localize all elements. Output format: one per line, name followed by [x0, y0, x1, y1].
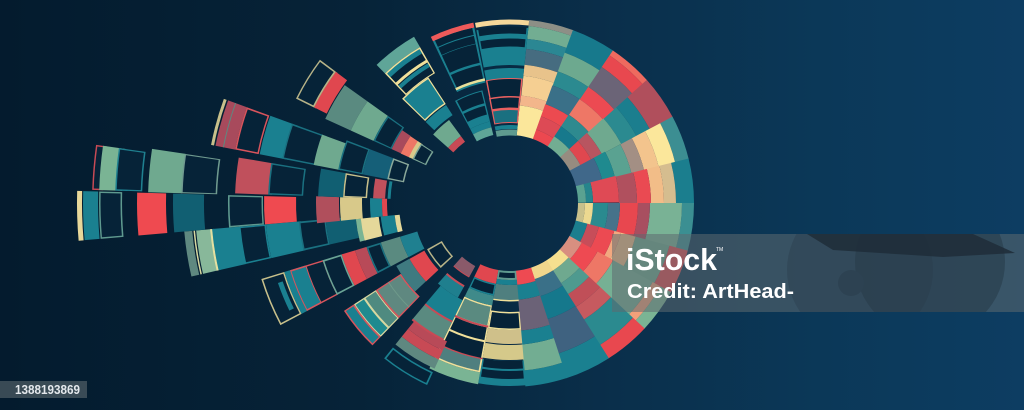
ring sector 57-72 — [339, 32, 681, 374]
trademark: TM — [716, 247, 723, 253]
wedge row 100-116 — [332, 25, 688, 381]
wedge row 114-129 outer — [317, 10, 703, 396]
ring sector 29-43 — [332, 25, 688, 381]
wedge row 119-132 inner — [408, 102, 612, 304]
wedge row 167-175 far — [187, 212, 318, 276]
wedge row 167-175 near — [340, 33, 680, 373]
wedge row 224-237 middle — [376, 69, 644, 337]
wedge row 152-163 inner — [324, 17, 696, 389]
ring sector 43-57 — [334, 27, 686, 379]
wedge row 85-100 — [338, 31, 682, 375]
ring sector 304-318 — [329, 22, 691, 384]
wedge row 206-217 outer — [304, 65, 342, 112]
wedge row 191-200 far — [212, 99, 311, 169]
stock id tag: 1388193869 — [15, 383, 80, 397]
ring sector 290-304 — [338, 31, 682, 375]
radial segmented wheel — [79, 10, 703, 396]
ring sector 346-360 — [335, 28, 685, 378]
wedge row 165-174 inner — [358, 52, 662, 354]
wedge row 175-181 outer — [79, 185, 281, 241]
banner strip — [612, 234, 1024, 312]
wedge row 182-190 near — [253, 161, 289, 197]
wedge row 226-240 outer — [324, 17, 696, 389]
wedge row 182-190 inner — [330, 24, 690, 382]
wedge row 259-276 — [329, 22, 691, 384]
wedge row 204-215 mid — [321, 14, 699, 392]
wedge row 242-256 inner — [401, 94, 619, 312]
credit line: Credit: ArtHead- — [627, 281, 794, 303]
wedge row 182-188 far — [97, 146, 132, 193]
ring sector 15-29 — [336, 28, 684, 378]
wedge row 182-189 mid — [164, 151, 203, 196]
wedge row 191-200 near — [324, 17, 696, 389]
ring sector 72-85 — [334, 27, 686, 379]
watermark banner — [612, 234, 1024, 312]
wedge row 134-147 outer — [318, 11, 702, 395]
stock id tag — [0, 381, 87, 398]
wedge row 116-130 middle — [358, 51, 662, 355]
wedge row 204-214 inner — [385, 78, 635, 328]
ring sector 318-332 — [339, 32, 681, 374]
wedge row 174-182 inner — [328, 20, 692, 386]
banner shadow shapes — [787, 234, 1015, 312]
ring sector 332-346 — [333, 26, 687, 380]
wedge row 137-151 inner — [388, 80, 632, 326]
ring sector 0-15 — [332, 25, 688, 381]
brand name: iStock — [626, 242, 718, 277]
wedge row 152-163 outer — [272, 259, 331, 320]
wedge row 191-201 inner — [348, 40, 672, 366]
wedge row 245-259 outer — [328, 22, 692, 384]
ring sector 276-290 — [329, 22, 691, 384]
wedge row 222-234 inner — [417, 110, 603, 296]
